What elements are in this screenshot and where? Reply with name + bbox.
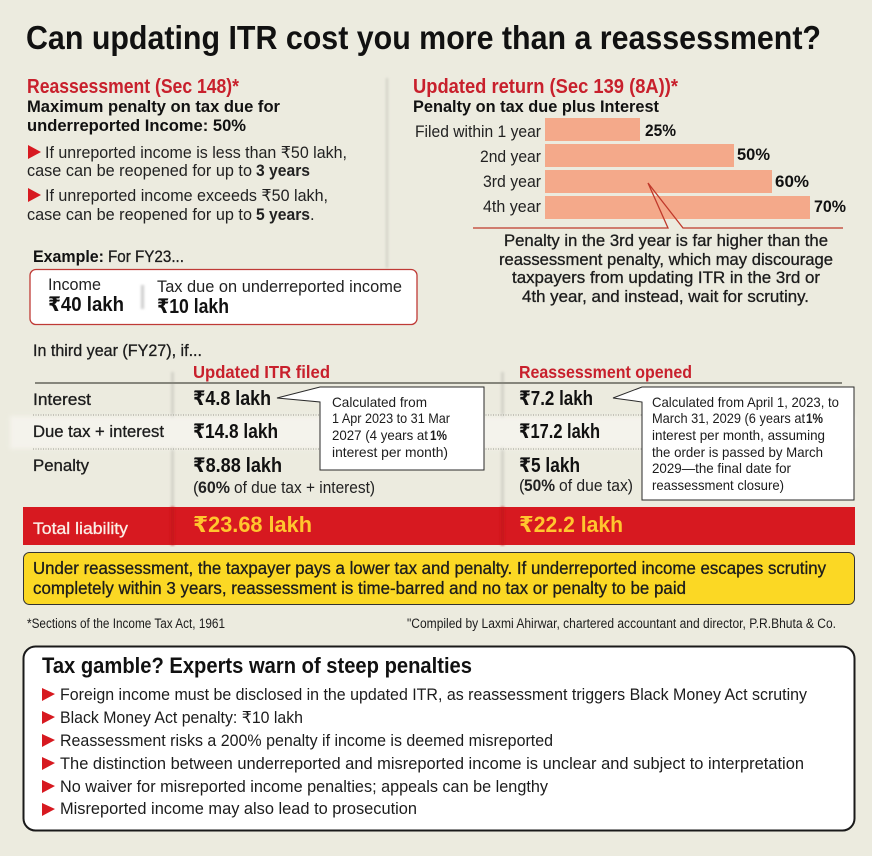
bullet: exceeds 50 lakh: case can be reopened for up to [27, 206, 252, 224]
callout: updated ITR interest: 1% [430, 427, 447, 443]
bullet list: The distinction between underreported and misreported income is unclear and subject to interpretation [60, 755, 804, 773]
bullet list: Foreign income must be disclosed in the updated ITR, as reassessment triggers Black Money Act scrutiny [60, 686, 808, 704]
total liability band: ₹23.68 lakh [193, 512, 312, 537]
callout text: Penalty in the 3rd year is far higher than the [504, 232, 828, 250]
heading: updated return: Updated return (Sec 139 (8A))* [413, 76, 678, 98]
bar chart: 70% [814, 198, 846, 216]
subheading: penalty: Penalty on tax due plus Interest [413, 97, 659, 116]
column: updated ITR filed: of due tax + interest) [234, 479, 375, 497]
callout: reassessment interest: the order is passed by March [652, 444, 823, 460]
bullet: less than 50 lakh: case can be reopened for up to [27, 162, 252, 180]
tax due: ₹10 lakh [157, 296, 229, 318]
column: reassessment opened: Reassessment opened [519, 362, 692, 382]
column: reassessment opened: of due tax) [559, 477, 633, 495]
income: Income [48, 276, 101, 294]
row labels: Due tax + interest [33, 423, 164, 441]
callout: updated ITR interest: Calculated from [332, 394, 427, 410]
callout: updated ITR interest: interest per month) [332, 444, 448, 460]
bar chart: 3rd year [483, 173, 541, 191]
subheading: third year: In third year (FY27), if... [33, 342, 202, 360]
callout text [499, 232, 833, 306]
row labels: Penalty [33, 457, 90, 475]
bullet: less than 50 lakh: If unreported income is less than ₹50 lakh, [45, 144, 347, 162]
panel: updated return section [413, 76, 846, 306]
bullet list [42, 686, 808, 818]
callout: reassessment interest [613, 387, 854, 500]
income [48, 276, 124, 316]
column: updated ITR filed [193, 362, 375, 497]
callout: updated ITR interest: 2027 (4 years at [332, 427, 428, 443]
bar chart: 2nd year [480, 148, 541, 166]
total liability band: Total liability [33, 520, 129, 538]
tax due [157, 278, 402, 318]
callout: reassessment interest: Calculated from April 1, 2023, to [652, 394, 839, 410]
comparison table [10, 362, 855, 497]
tax due: Tax due on underreported income [157, 278, 402, 296]
bullet list: No waiver for misreported income penalties; appeals can be lengthy [60, 778, 549, 796]
income: ₹40 lakh [48, 294, 124, 316]
column: reassessment opened: 50% [524, 477, 555, 495]
column: reassessment opened: ( [519, 477, 525, 495]
column: reassessment opened: ₹7.2 lakh [519, 388, 593, 410]
bar chart: 50% [737, 146, 770, 164]
bullet: less than 50 lakh: 3 years [256, 162, 310, 180]
example label: Example: [33, 248, 104, 266]
bar chart: Filed within 1 year [415, 123, 541, 141]
column: updated ITR filed: Updated ITR filed [193, 362, 330, 382]
callout: reassessment interest: 1% [806, 410, 823, 426]
bar chart [415, 118, 846, 219]
column: updated ITR filed: ₹14.8 lakh [193, 421, 278, 443]
bullet list: Black Money Act penalty: ₹10 lakh [60, 709, 303, 727]
total liability band [23, 507, 855, 545]
column: reassessment opened: ₹5 lakh [519, 455, 580, 477]
bullet: exceeds 50 lakh: 5 years [256, 206, 310, 224]
heading: reassessment: Reassessment (Sec 148)* [27, 76, 239, 98]
callout: updated ITR interest [277, 387, 484, 470]
bar chart: 60% [775, 173, 809, 191]
bullet: exceeds 50 lakh [27, 187, 328, 224]
bullet: exceeds 50 lakh: . [310, 206, 315, 224]
total liability band: ₹22.2 lakh [519, 512, 623, 537]
heading: tax gamble: Tax gamble? Experts warn of steep penalties [42, 653, 472, 678]
column: reassessment opened: ₹17.2 lakh [519, 421, 600, 443]
callout text: reassessment penalty, which may discourage [499, 251, 833, 269]
callout text: 4th year, and instead, wait for scrutiny. [522, 288, 809, 306]
panel: tax gamble [24, 646, 854, 830]
footnote: sections: *Sections of the Income Tax Act, 1961 [27, 616, 225, 631]
column: reassessment opened [519, 362, 692, 495]
panel: reassessment section [27, 76, 347, 224]
column: updated ITR filed: ( [193, 479, 199, 497]
bullet list: Misreported income may also lead to prosecution [60, 800, 417, 818]
bar chart: 4th year [483, 198, 541, 216]
callout: reassessment interest: March 31, 2029 (6 years at [652, 410, 805, 426]
callout: reassessment interest: interest per month, assuming [652, 427, 825, 443]
subheading: maximum penalty [27, 97, 280, 135]
row labels [33, 391, 164, 475]
title: Can updating ITR cost you more than a reassessment? [26, 19, 821, 56]
bar chart: 25% [645, 122, 676, 140]
column: updated ITR filed: ₹4.8 lakh [193, 388, 271, 410]
callout text: taxpayers from updating ITR in the 3rd or [512, 269, 821, 287]
column: updated ITR filed: ₹8.88 lakh [193, 455, 282, 477]
conclusion note [24, 552, 854, 604]
callout: reassessment interest: reassessment closure) [652, 477, 784, 493]
conclusion note: completely within 3 years, reassessment is time-barred and no tax or penalty to be paid [33, 578, 686, 598]
callout: reassessment interest: 2029—the final date for [652, 460, 791, 476]
callout: updated ITR interest: 1 Apr 2023 to 31 Mar [332, 410, 450, 426]
callout pointer line [473, 183, 843, 228]
conclusion note: Under reassessment, the taxpayer pays a lower tax and penalty. If underreported income escapes scrutiny [33, 558, 826, 578]
example label [33, 248, 184, 266]
subheading: maximum penalty: Maximum penalty on tax due for [27, 97, 280, 116]
example box [30, 270, 417, 324]
example label: For FY23... [108, 248, 184, 266]
bullet: less than 50 lakh [27, 144, 347, 180]
row labels: Interest [33, 391, 91, 409]
bullet list: Reassessment risks a 200% penalty if income is deemed misreported [60, 732, 553, 750]
column: updated ITR filed: 60% [198, 479, 230, 497]
bullet: exceeds 50 lakh: If unreported income exceeds ₹50 lakh, [45, 187, 328, 205]
subheading: maximum penalty: underreported Income: 50% [27, 116, 246, 135]
